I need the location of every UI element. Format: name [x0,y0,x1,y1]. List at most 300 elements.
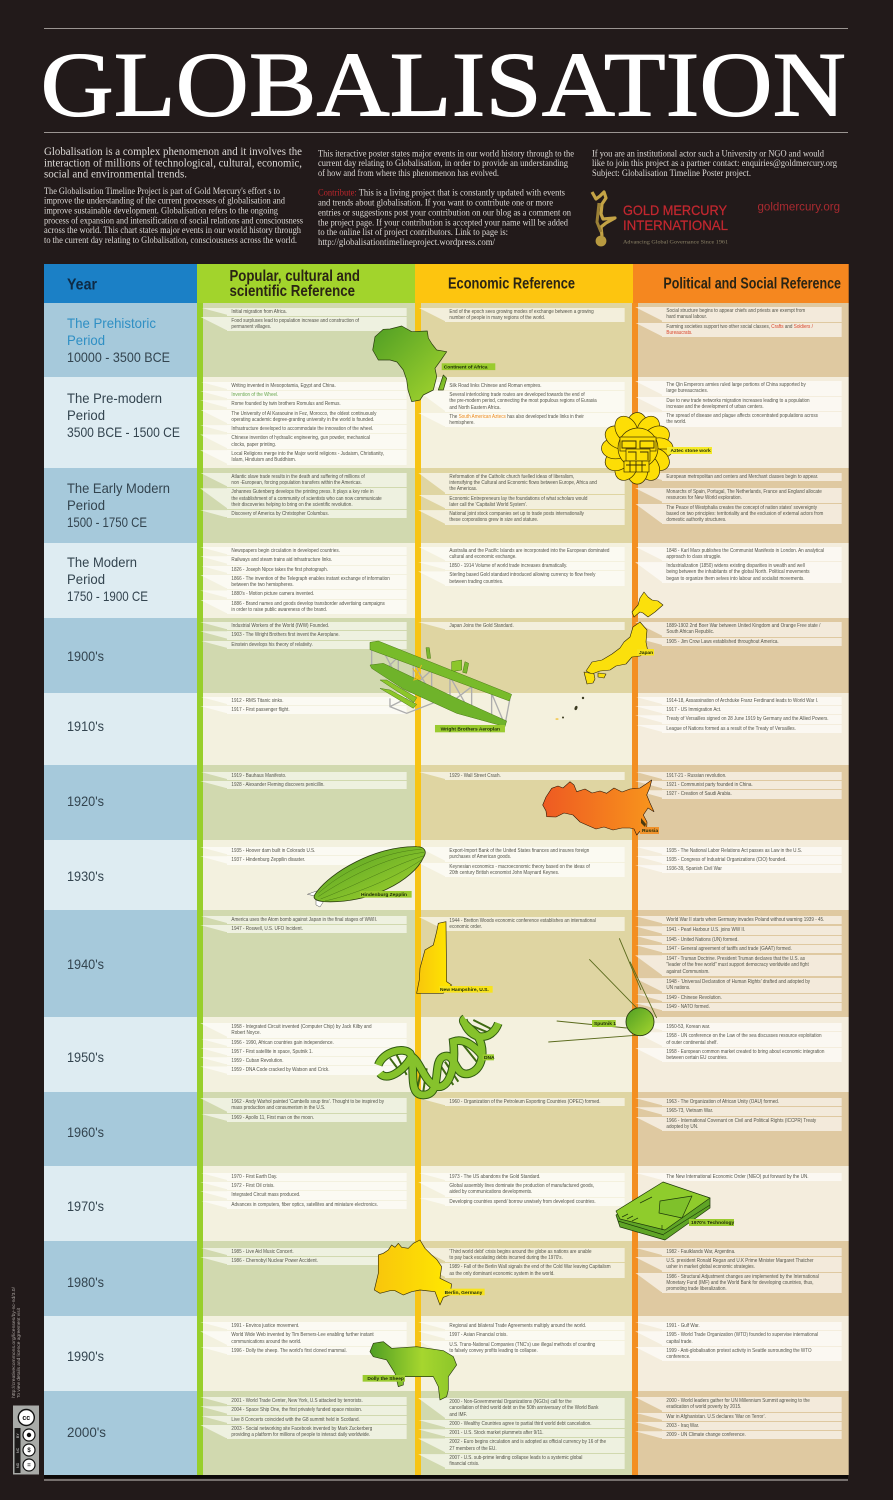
1940s political events: 1948 - 'Universal Declaration of Human Rights' drafted and adopted by [666,979,810,985]
1900s popular events: 1903 - The Wright Brothers first invent the Aeroplane. [231,632,340,638]
panel: popular column rows [197,303,415,1475]
prehistoric economic events: End of the epoch sees growing modes of exchange between a growing [449,308,594,314]
intro text: middle column [318,148,574,247]
early modern popular events: non -European, forcing population transfers within the Americas. [231,480,362,486]
early modern political events: resources for New World exploration. [666,495,742,501]
modern period popular events: Newspapers begin circulation in developed countries. [231,548,340,554]
illustration: DNA helix: DNA [484,1055,495,1061]
logo: Gold Mercury International: GOLD MERCURY [623,202,728,218]
2000s economic events: 2002 - Euro begins circulation and is adopted as official currency by 16 of the [449,1439,606,1445]
intro text: middle column: This iteractive poster states major events in our world history through to the [318,148,574,158]
early modern economic events: Economic Entrepreneurs lay the foundations of what scholars would [449,496,587,502]
intro text: right column [592,148,837,178]
intro text: left column: improve the understanding of the current processes of globalisation and [44,196,285,206]
1910s popular events: 1912 - RMS Titanic sinks. [231,698,283,704]
early modern political events: based on two principles: territoriality and the exclusion of external actors from [666,511,823,517]
modern period popular events: in order to raise public awareness of the brand. [231,607,327,613]
1930s economic events: Export-Import Bank of the United States finances and insures foreign [449,848,589,854]
illustration: New Hampshire: New Hampshire, U.S. [440,987,489,993]
modern period political events: 1848 - Karl Marx publishes the Communist Manifesto in London. An analytical [666,548,824,554]
panel: political column rows [632,303,849,1475]
1970s popular events: 1972 - First Oil crisis. [231,1183,275,1189]
1990s economic events: Regional and bilateral Trade Agreements multiply around the world. [449,1323,586,1329]
1960s political events: 1963 - The Organization of African Unity (OAU) formed. [666,1099,779,1105]
2000s economic events: and IMF. [449,1412,467,1418]
intro text: left column: process of expansion and intensification of social relations and consciousness [44,215,303,225]
2000s political events: eradication of world poverty by 2015. [666,1404,741,1410]
2000s political events: 2003 - Iraq War. [666,1423,699,1429]
1990s popular events: 1991 - Enviros justice movement. [231,1323,299,1329]
modern period economic events [418,547,624,586]
1910s political events: League of Nations formed as a result of the Treaty of Versailles. [666,726,796,732]
1930s economic events: purchases of American goods. [449,854,511,860]
panel: political and social events [636,307,842,1439]
prehistoric political events: Social structure begins to appear chiefs and priests are exempt from [666,308,805,314]
early modern popular events: their discoveries helping to bring on the scientific revolution. [231,502,353,508]
year labels: The Pre-modern [67,390,162,406]
1920s popular events: 1919 - Bauhaus Manifesto. [231,773,286,779]
1980s political events: Monetary Fund (IMF) and the World Bank for developing countries, thus, [666,1280,814,1286]
pre-modern popular events: clocks, paper printing. [231,442,276,448]
1960s political events: 1965-73, Vietnam War. [666,1108,713,1114]
pre-modern popular events: Chinese invention of hydraulic engineering, gun powder, mechanical [231,435,370,441]
1920s political events [636,772,842,799]
1980s political events: promoting trade liberalization. [666,1286,727,1292]
2000s political events [662,1397,842,1440]
intro text: right column: Subject: Globalisation Timeline Poster project. [592,168,751,178]
modern period political events [636,547,842,583]
1960s popular events: mass production and consumerism in the U.S. [231,1105,325,1111]
1970s economic events: Developing countries spend/ borrow unwisely from developed countries. [449,1199,596,1205]
year labels: 1500 - 1750 CE [67,514,147,530]
year labels: 3500 BCE - 1500 CE [67,424,180,440]
pre-modern economic events: and North Eastern Africa. [449,405,501,411]
2000s economic events: 2000 - Wealthy Countries agree to partial third world debt cancelation. [449,1421,591,1427]
early modern political events: European metropolitan and centers and Merchant classes begin to appear. [666,474,818,480]
intro text: right column: If you are an institutional actor such a University or NGO and would [592,148,824,158]
2000s economic events: 27 members of the EU. [449,1446,497,1452]
2000s economic events [418,1398,625,1469]
early modern political events: domestic authority structures. [666,517,726,523]
year labels: 1910's [67,718,104,734]
2000s popular events: 2001 - World Trade Center, New York, U.S attacked by terrorists. [231,1398,363,1404]
licence note: http://creativecommons.org/licenses/by-nc-nd/3.0/ [11,1286,16,1398]
1930s political events: 1935 - The National Labor Relations Act passes as Law in the U.S. [666,848,802,854]
panel: economic column rows [415,303,632,1475]
1940s political events: against Communism. [666,969,710,975]
1950s political events [662,1023,842,1063]
1900s political events: South African Republic. [666,629,714,635]
1970s economic events [418,1173,624,1206]
1980s political events [662,1248,842,1294]
1950s political events: 1958 - UN conference on the Law of the sea discusses resource exploitation [666,1033,822,1039]
early modern economic events: the Americas. [449,486,477,492]
prehistoric economic events: number of people in many regions of the world. [449,315,545,321]
modern period popular events: 1880's - Motion picture camera invented. [231,591,314,597]
illustration: Aztec stone work [601,412,712,485]
early modern popular events: the establishment of a community of scientists who can now communicate [231,496,382,502]
1950s political events: 1958 - European common market created to bring about economic integration [666,1049,824,1055]
illustration: Wright Brothers aeroplane [370,641,512,732]
column header: popular, cultural and scientific: scientific Reference [230,283,355,300]
year labels: Period [67,407,105,423]
early modern political events: Monarchs of Spain, Portugal, The Netherlands, France and England allocate [666,489,822,495]
illustration: 1970's technology [616,1182,734,1240]
prehistoric popular events [200,308,407,331]
1950s popular events: 1957 - First satellite in space, Sputnik 1. [231,1049,313,1055]
intro text: left column: across the world. This chart states major events in our world history through [44,225,301,235]
early modern political events: The Peace of Westphalia creates the concept of nation states' sovereignty [666,505,817,511]
pre-modern political events [636,381,842,427]
1900s economic events: Japan Joins the Gold Standard. [449,623,514,629]
modern period economic events: Australia and the Pacific Islands are incorporated into the European dominated [449,548,609,554]
1920s political events: 1917-21 - Russian revolution. [666,773,726,779]
illustration: Dolly the sheep [363,1342,457,1400]
1910s political events: Treaty of Versailles signed on 28 June 1919 by Germany and the Allied Powers. [666,716,829,722]
early modern economic events: later call the 'Capitalist World System'. [449,502,527,508]
1900s political events [636,622,842,646]
early modern economic events: National joint stock companies set up to trade posts internationally [449,511,584,517]
early modern economic events: intensifying the Cultural and Economic flows between Europe, Africa and [449,480,597,486]
1940s political events: 1947 - Truman Doctrine. President Truman declares that the U.S. as [666,956,805,962]
prehistoric political events [636,307,842,337]
year labels: 1920's [67,793,104,809]
pre-modern economic events: Several interlocking trade routes are developed towards the end of [449,392,585,398]
2000s economic events: 2007 - U.S. sub-prime lending collapse leads to a systemic global [449,1455,582,1461]
1990s economic events [418,1322,624,1355]
pre-modern economic events: Silk Road links Chinese and Roman empires. [449,383,542,389]
1990s economic events: U.S. Trans-National Companies (TNC's) use illegal methods of counting [449,1342,595,1348]
illustration: Sputnik 1: Sputnik 1 [594,1021,616,1027]
1920s popular events: 1928 - Alexander Fleming discovers penicillin. [231,782,325,788]
intro text: middle column: and trends about globalisation. If you want to contribute one or more [318,198,553,208]
year labels: The Prehistoric [67,315,156,331]
modern period political events: Industrialization (1850) widens existing disparities in wealth and well [666,563,805,569]
1980s popular events: 1985 - Live Aid Music Concert. [231,1249,294,1255]
pre-modern popular events: Infrastructure developed to accommodate the innovation of the wheel. [231,426,373,432]
modern period popular events: 1826 - Joseph Nipce takes the first photograph. [231,567,328,573]
early modern popular events: Discovery of America by Christopher Columbus. [231,511,329,517]
intro text: middle column: current day relating to Globalisation, in order to provide an understanding [318,158,568,168]
1930s political events: 1935 - Congress of Industrial Organizations (CIO) founded. [666,857,787,863]
logo: Gold Mercury International: INTERNATIONAL [623,217,728,233]
1970s popular events [200,1173,406,1209]
2000s economic events: 2000 - Non-Governmental Organizations (NGOs) call for the [449,1399,572,1405]
column header: year: Year [67,276,97,294]
1940s economic events: economic order. [449,924,482,930]
1910s political events [636,697,842,733]
early modern economic events: these corporations grew in size and stature. [449,517,538,523]
icon: creative commons badge: NC [16,1447,20,1453]
1980s political events: 1986 - Structural Adjustment changes are implemented by the International [666,1274,819,1280]
pre-modern political events: Due to new trade networks migration increases leading to a population [666,398,810,404]
illustration: Russia: Russia [642,828,658,834]
1950s popular events: 1958 - Integrated Circuit invented (Computer Chip) by Jack Kilby and [231,1024,372,1030]
1960s political events [662,1098,842,1132]
illustration: New Hampshire [417,922,493,993]
1940s political events: 1941 - Pearl Harbour U.S. joins WW II. [666,927,745,933]
1900s popular events [200,622,407,649]
year labels: 1930's [67,868,104,884]
intro text: left column: Globalisation is a complex phenomenon and it involves the [44,144,302,158]
2000s popular events: Live 8 Concerts coincided with the G8 summit held in Scotland. [231,1417,360,1423]
1940s political events: 1949 - Chinese Revolution. [666,995,722,1001]
intro text: left column: The Globalisation Timeline Project is part of Gold Mercury's effort s to [44,186,280,196]
1990s political events: capital trade. [666,1339,693,1345]
1990s economic events: 1997 - Asian Financial crisis. [449,1332,508,1338]
year labels: 1750 - 1900 CE [67,588,148,604]
year labels: 1990's [67,1348,104,1364]
modern period popular events: Railways and steam trains aid infrastructure links. [231,557,332,563]
1920s political events: 1927 - Creation of Saudi Arabia. [666,791,732,797]
prehistoric popular events: Food surpluses lead to population increase and construction of [231,318,359,324]
panel: popular, cultural and scientific events [200,308,407,1439]
1910s popular events [200,697,406,714]
modern period popular events: between the two hemispheres. [231,582,294,588]
1970s popular events: 1970 - First Earth Day. [231,1174,277,1180]
intro text: left column: improve sustainable development. Globalisation refers to the ongoing [44,206,278,216]
1990s popular events: communications around the world. [231,1339,301,1345]
modern period popular events: 1886 - Brand names and goods develop transborder advertising campaigns [231,601,385,607]
modern period popular events: 1866 - The invention of the Telegraph enables instant exchange of information [231,576,390,582]
illustration: continent of Africa [373,326,495,402]
1900s popular events: Industrial Workers of the World (IWW) Founded. [231,623,329,629]
1940s economic events [419,917,625,931]
2000s economic events: cancellation of third world debt on the 50th anniversary of the World Bank [449,1405,598,1411]
2000s political events: War in Afghanistan. U.S declares 'War on Terror'. [666,1414,766,1420]
panel: economic events [418,308,625,1469]
pre-modern political events: The Qin Emperors armies ruled large portions of China supported by [666,382,806,388]
1910s political events: 1914-18, Assassination of Archduke Franz Ferdinand leads to World War I. [666,698,818,704]
prehistoric economic events [419,308,625,322]
1920s economic events: 1929 - Wall Street Crash. [449,773,501,779]
year labels: 1970's [67,1198,104,1214]
1950s popular events: 1959 - Cuban Revolution. [231,1058,284,1064]
illustration: Aztec stone work: Aztec stone work [670,448,711,454]
illustration: Japan [555,592,663,720]
pre-modern economic events: the pre-modern period, connecting the most populous regions of Eurasia [449,398,597,404]
1930s popular events: 1937 - Hindenburg Zeppilin disaster. [231,857,305,863]
title: GLOBALISATION [40,34,846,135]
icon: creative commons badge: ND [16,1462,20,1468]
1900s political events: 1905 - Jim Crow Laws established throughout America. [666,639,779,645]
1990s popular events [200,1322,406,1355]
intro text: middle column: Contribute: This is a living project that is constantly updated with events [318,188,565,198]
1940s popular events [200,916,407,933]
1920s popular events [200,772,407,789]
column header: political and social: Political and Social Reference [663,276,841,292]
column header: popular, cultural and scientific [197,264,415,303]
1960s political events: 1966 - International Covenant on Civil and Political Rights (ICCPR) Treaty [666,1118,816,1124]
1990s political events: 1999 - Anti-globalisation protest activity in Seattle surrounding the WTO [666,1348,812,1354]
2000s popular events: 2003 - Social networking site Facebook invented by Mark Zuckerberg [231,1426,372,1432]
illustration: Dolly the sheep: Dolly the Sheep [367,1376,404,1382]
intro text: left column: to the current day relating to Globalisation, consciousness across the world. [44,235,297,245]
1990s economic events: to falsely convey profits leading to collapse. [449,1348,538,1354]
1980s economic events: 1989 - Fall of the Berlin Wall signals the end of the Cold War leaving Capitalism [449,1264,611,1270]
prehistoric popular events: permanent villages. [231,324,271,330]
modern period economic events: Sterling based Gold standard introduced allowing currency to flow freely [449,572,595,578]
illustration: Wright Brothers aeroplane: Wright Brothers Aeroplan [441,726,500,732]
1980s economic events: as the only dominant economic system in the world. [449,1271,555,1277]
1970s economic events: aided by communications developments. [449,1189,532,1195]
1950s popular events: 1956 - 1990, African countries gain independence. [231,1040,334,1046]
panel: year column [44,303,197,1475]
1930s political events: 1936-39, Spanish Civil War [666,866,722,872]
logo: Gold Mercury International: Advancing Global Governance Since 1961 [623,240,728,246]
prehistoric political events: Farming societies support two other social classes, Crafts and Soldiers / [666,324,813,330]
early modern economic events [418,473,625,525]
1960s economic events: 1960 - Organization of the Petroleum Exporting Countries (OPEC) formed. [449,1099,600,1105]
column header: economic [415,264,633,303]
1970s popular events: Advances in computers, fiber optics, satellites and miniature electronics. [231,1202,378,1208]
modern period economic events: 1850 - 1914 Volume of world trade increases dramatically. [449,563,567,569]
1980s popular events [200,1248,389,1265]
icon: creative commons badge [13,1406,39,1474]
1950s popular events [200,1023,406,1075]
1950s popular events: Robert Noyce. [231,1030,261,1036]
prehistoric popular events: Initial migration from Africa. [231,308,287,314]
1960s popular events: 1969 - Apollo 11, First man on the moon. [231,1115,314,1121]
1950s political events: of outer continental shelf. [666,1040,718,1046]
1960s popular events: 1962 - Andy Warhol painted 'Cambells soup tins'. Thought to be inspired by [231,1099,384,1105]
1980s political events: U.S. president Ronald Regan and U.K Prime Minister Margaret Thatcher [666,1258,814,1264]
1950s political events: between certain EU countries. [666,1055,728,1061]
year labels: 1940's [67,956,104,972]
illustration: DNA helix [378,1018,498,1095]
1960s popular events [200,1098,407,1122]
year labels: 1960's [67,1124,104,1140]
early modern popular events: Johannes Gutenberg develops the printing press. It plays a key role in [231,489,374,495]
licence note: To view details and licence agreement visit [16,1307,21,1398]
year labels: 2000's [67,1424,106,1440]
1980s political events: 1982 - Faulklands War, Argentina. [666,1249,735,1255]
1910s political events: 1917 - US Immigration Act. [666,707,721,713]
1900s popular events: Einstein develops his theory of relativity. [231,642,313,648]
column header: year [44,264,197,303]
1930s popular events: 1935 - Hoover dam built in Colorado U.S. [231,848,315,854]
pre-modern popular events: Invention of the Wheel. [231,392,278,398]
pre-modern popular events: Writing invented in Mesopotamia, Egypt and China. [231,383,336,389]
modern period political events: began to organize them selves into labour and socialist movements. [666,576,804,582]
year labels: 1900's [67,648,104,664]
1950s political events: 1950-53, Korean war. [666,1024,710,1030]
2000s political events: 2000 - World leaders gather for UN Millennium Summit agreeing to the [666,1398,810,1404]
icon: creative commons badge: BY [16,1433,20,1438]
column header: popular, cultural and scientific: Popular, cultural and [230,268,360,285]
1940s political events [636,916,842,1011]
intro text: middle column: of how and from where this phenomenon has evolved. [318,168,499,178]
1980s popular events: 1986 - Chernobyl Nuclear Power Accident. [231,1258,318,1264]
early modern economic events: Reformation of the Catholic church fuelled ideas of liberalism, [449,474,574,480]
1960s political events: adopted by UN. [666,1124,698,1130]
1940s popular events: 1947 - Roswell, U.S. UFO Incident. [231,926,303,932]
modern period political events: approach to class struggle. [666,554,721,560]
intro text: left column [44,144,303,245]
1970s political events: The New International Economic Order (NIEO) put forward by the UN. [666,1174,809,1180]
1940s political events: 1949 - NATO formed. [666,1004,710,1010]
icon: creative commons badge: cc [22,1415,30,1422]
pre-modern popular events: Local Religions merge into the Major world religions - Judaism, Christianity, [231,451,384,457]
1900s political events: 1889-1902 2nd Boer War between United Kingdom and Orange Free state / [666,623,820,629]
year labels: Period [67,332,105,348]
illustration: 1970's technology: 1970's Technology [691,1220,734,1226]
pre-modern political events: increase and the development of urban centers. [666,404,764,410]
1970s popular events: Integrated Circuit mass produced. [231,1192,300,1198]
pre-modern popular events: The University of Al Karaouine in Fez, Morocco, the oldest continuously [231,411,376,417]
1990s political events [662,1322,842,1362]
1950s popular events: 1959 - DNA Code cracked by Watson and Crick. [231,1067,329,1073]
2000s popular events: providing a platform for millions of people to interact daily worldwide. [231,1432,370,1438]
2000s political events: 2009 - UN Climate change conference. [666,1432,746,1438]
pre-modern popular events: Rome founded by twin brothers Romulus and Remus. [231,401,341,407]
1980s economic events [425,1248,625,1278]
illustration: Berlin [374,1240,485,1305]
1940s political events: UN nations. [666,985,690,991]
logo: Gold Mercury International [592,192,728,246]
illustration: Hindenburg zeppelin [307,847,425,907]
1990s political events: 1991 - Gulf War. [666,1323,700,1329]
1940s political events: 1947 - General agreement of tariffs and trade (GAAT) formed. [666,946,792,952]
pre-modern political events: the world. [666,419,686,425]
1920s political events: 1921 - Communist party founded in China. [666,782,753,788]
1910s popular events: 1917 - First passenger flight. [231,707,290,713]
intro text: middle column: http://globalisationtimelineproject.wordpress.com/ [318,237,495,247]
1990s political events: conference. [666,1354,690,1360]
pre-modern popular events: operating academic degree-granting university in the world is founded. [231,417,374,423]
intro text: middle column: to the online list of project contributors. Link to page is: [318,227,508,237]
intro text: middle column: entries or suggestions post your contribution on our blog as a comment on [318,207,571,217]
column header: political and social [633,264,849,303]
pre-modern economic events: The South American Aztecs has also developed trade links in their [449,414,584,420]
intro text: middle column: the project page. If your contribution is accepted your name will be added [318,217,568,227]
1980s economic events: 'Third world debt' crisis begins around the globe as nations are unable [449,1249,592,1255]
year labels: The Early Modern [67,480,170,496]
1940s political events: "leader of the free world" must support democracy worldwide and fight [666,962,809,968]
1970s economic events: 1973 - The US abandons the Gold Standard. [449,1174,540,1180]
1940s political events: World War II starts when Germany invades Poland without warning 1939 - 45. [666,917,824,923]
pre-modern political events: The spread of disease and plague affects concentrated populations across [666,413,818,419]
icon: creative commons badge: = [27,1463,31,1469]
pre-modern economic events [418,382,624,427]
illustration: Sputnik 1 [548,938,657,1042]
modern period political events: being between the inhabitants of the global North. Political movements [666,569,810,575]
modern period popular events [200,547,406,614]
pre-modern economic events: hemisphere. [449,420,475,426]
2000s economic events: financial crisis. [449,1461,479,1467]
intro text: right column: like to join this project as a partner contact: enquiries@goldmercury.org [592,158,837,168]
1990s political events: 1995 - World Trade Organization (WTO) founded to supervise international [666,1332,818,1338]
1990s popular events: World Wide Web invented by Tim Berners-Lee enabling further instant [231,1332,374,1338]
1940s political events: 1945 - United Nations (UN) formed. [666,937,739,943]
early modern popular events [200,473,407,518]
early modern popular events: Atlantic slave trade results in the death and suffering of millions of [231,474,365,480]
licence note [11,1286,21,1398]
website link: goldmercury.org [758,200,840,214]
1930s popular events [200,847,401,865]
year labels: 10000 - 3500 BCE [67,349,170,365]
1940s popular events: America uses the Atom bomb against Japan in the final stages of WWII. [231,917,377,923]
1930s economic events: 20th century British economist John Maynard Keynes. [449,870,559,876]
column header: economic: Economic Reference [448,276,575,292]
1990s popular events: 1996 - Dolly the sheep. The world's first cloned mammal. [231,1348,347,1354]
1930s economic events: Keynesian economics - macroeconomic theory based on the ideas of [449,864,590,870]
1930s political events [636,847,842,873]
illustration: Berlin: Berlin, Germany [445,1290,483,1296]
illustration: Japan: Japan [639,650,653,656]
intro text: left column: interaction of millions of technological, cultural, economic, [44,155,302,169]
year labels: Period [67,571,105,587]
